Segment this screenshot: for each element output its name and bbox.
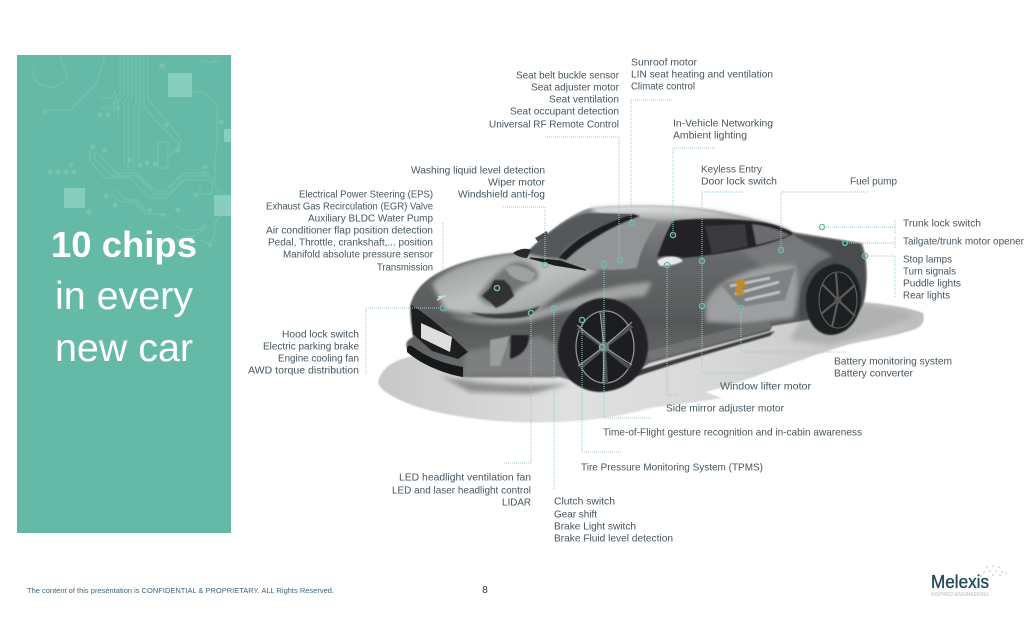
labels: rear: Puddle lights [903,278,961,290]
labels: sunroof and climate: Climate control [631,82,695,92]
lower front bumper light panel [463,336,556,376]
front bumper vents [490,336,510,366]
labels: rear: Turn signals [903,266,956,278]
labels: seat functions: Seat occupant detection [510,106,619,118]
callout lines and chip markers [366,100,895,490]
labels: networking: In-Vehicle Networking [673,118,773,130]
labels: battery: Battery converter [834,368,914,380]
labels: front: AWD torque distribution [248,366,359,376]
labels: powertrain: Air conditioner flap position detection [266,226,433,236]
labels: powertrain: Electrical Power Steering (EPS) [299,190,433,200]
footer note: The content of this presentation is CONFIDENTIAL & PROPRIETARY. ALL Rights Reserved. [27,586,334,595]
labels: seat functions: Seat adjuster motor [531,82,620,94]
door light panel [705,265,798,324]
labels: rear: Rear lights [903,290,950,302]
labels: front: Engine cooling fan [278,354,359,364]
labels: brake: Brake Fluid level detection [554,534,673,544]
labels: headlight: LIDAR [502,498,531,508]
labels: brake [554,496,673,544]
labels: seat functions: Seat belt buckle sensor [516,70,620,82]
labels: powertrain: Auxiliary BLDC Water Pump [308,214,433,224]
label: window lifter: Window lifter motor [720,382,812,392]
rear quarter [793,234,865,320]
labels: door: Door lock switch [701,176,777,188]
licence plate [421,323,452,352]
labels: sunroof and climate [631,58,773,92]
labels: sunroof and climate: LIN seat heating and ventilation [631,70,773,80]
labels: windshield: Washing liquid level detection [411,166,545,176]
labels: rear: Stop lamps [903,254,952,266]
battery and electronics [720,268,795,307]
label: time of flight: Time-of-Flight gesture recognition and in-cabin awareness [603,428,862,438]
labels: headlight: LED headlight ventilation fan [399,472,531,484]
labels: door: Keyless Entry [701,164,763,176]
labels: powertrain: Pedal, Throttle, crankshaft,... position [268,238,433,248]
car illustration [378,205,924,422]
labels: brake: Brake Light switch [554,522,636,532]
side mirror [657,256,683,266]
labels: seat functions [489,70,620,130]
front grille [411,305,468,359]
labels: front [248,330,359,376]
rear wheel [806,264,861,335]
labels: powertrain: Exhaust Gas Recirculation (EGR) Valve [266,202,433,212]
labels: headlight: LED and laser headlight control [392,486,531,496]
windshield [527,213,658,270]
car body [406,205,867,386]
side windows [657,219,793,258]
labels: headlight [392,472,531,508]
circuit board pattern [33,55,231,247]
labels: battery [834,356,952,380]
label: side mirror: Side mirror adjuster motor [666,404,785,414]
labels: battery: Battery monitoring system [834,356,952,368]
front wheel [558,298,648,392]
labels: networking: Ambient lighting [673,130,747,142]
engine [478,262,538,308]
labels: rear: Trunk lock switch [903,218,981,230]
labels: seat functions: Seat ventilation [549,94,619,106]
transparent hood and engine bay [432,253,600,315]
labels: windshield: Wiper motor [488,178,546,188]
title: 10 chips [51,224,197,265]
labels: windshield [411,166,546,200]
title: in every [55,275,193,318]
labels: front: Hood lock switch [282,330,359,340]
labels: powertrain [266,190,434,274]
title [51,224,197,370]
side sill [632,331,775,377]
labels: seat functions: Universal RF Remote Control [489,120,619,130]
label: TPMS: Tire Pressure Monitoring System (TPMS) [581,462,763,474]
labels: brake: Clutch switch [554,496,615,508]
logo: Melexis: Melexis [931,572,989,592]
logo: Melexis [931,565,1007,598]
labels: front: Electric parking brake [263,342,359,352]
labels: networking [673,118,773,142]
labels: brake: Gear shift [554,510,597,520]
page number: 8 [482,585,488,596]
roof fade [590,205,793,232]
labels: powertrain: Manifold absolute pressure sensor [283,250,434,260]
labels: sunroof and climate: Sunroof motor [631,58,698,68]
labels: windshield: Windshield anti-fog [458,190,545,200]
car ground shadow [378,302,924,422]
labels: rear [903,218,1024,302]
labels: door [701,164,777,188]
labels: powertrain: Transmission [377,262,433,274]
title: new car [55,327,193,370]
panel: teal title panel [17,55,231,533]
label: fuel pump: Fuel pump [850,176,897,188]
logo: Melexis: INSPIRED ENGINEERING [931,592,989,598]
